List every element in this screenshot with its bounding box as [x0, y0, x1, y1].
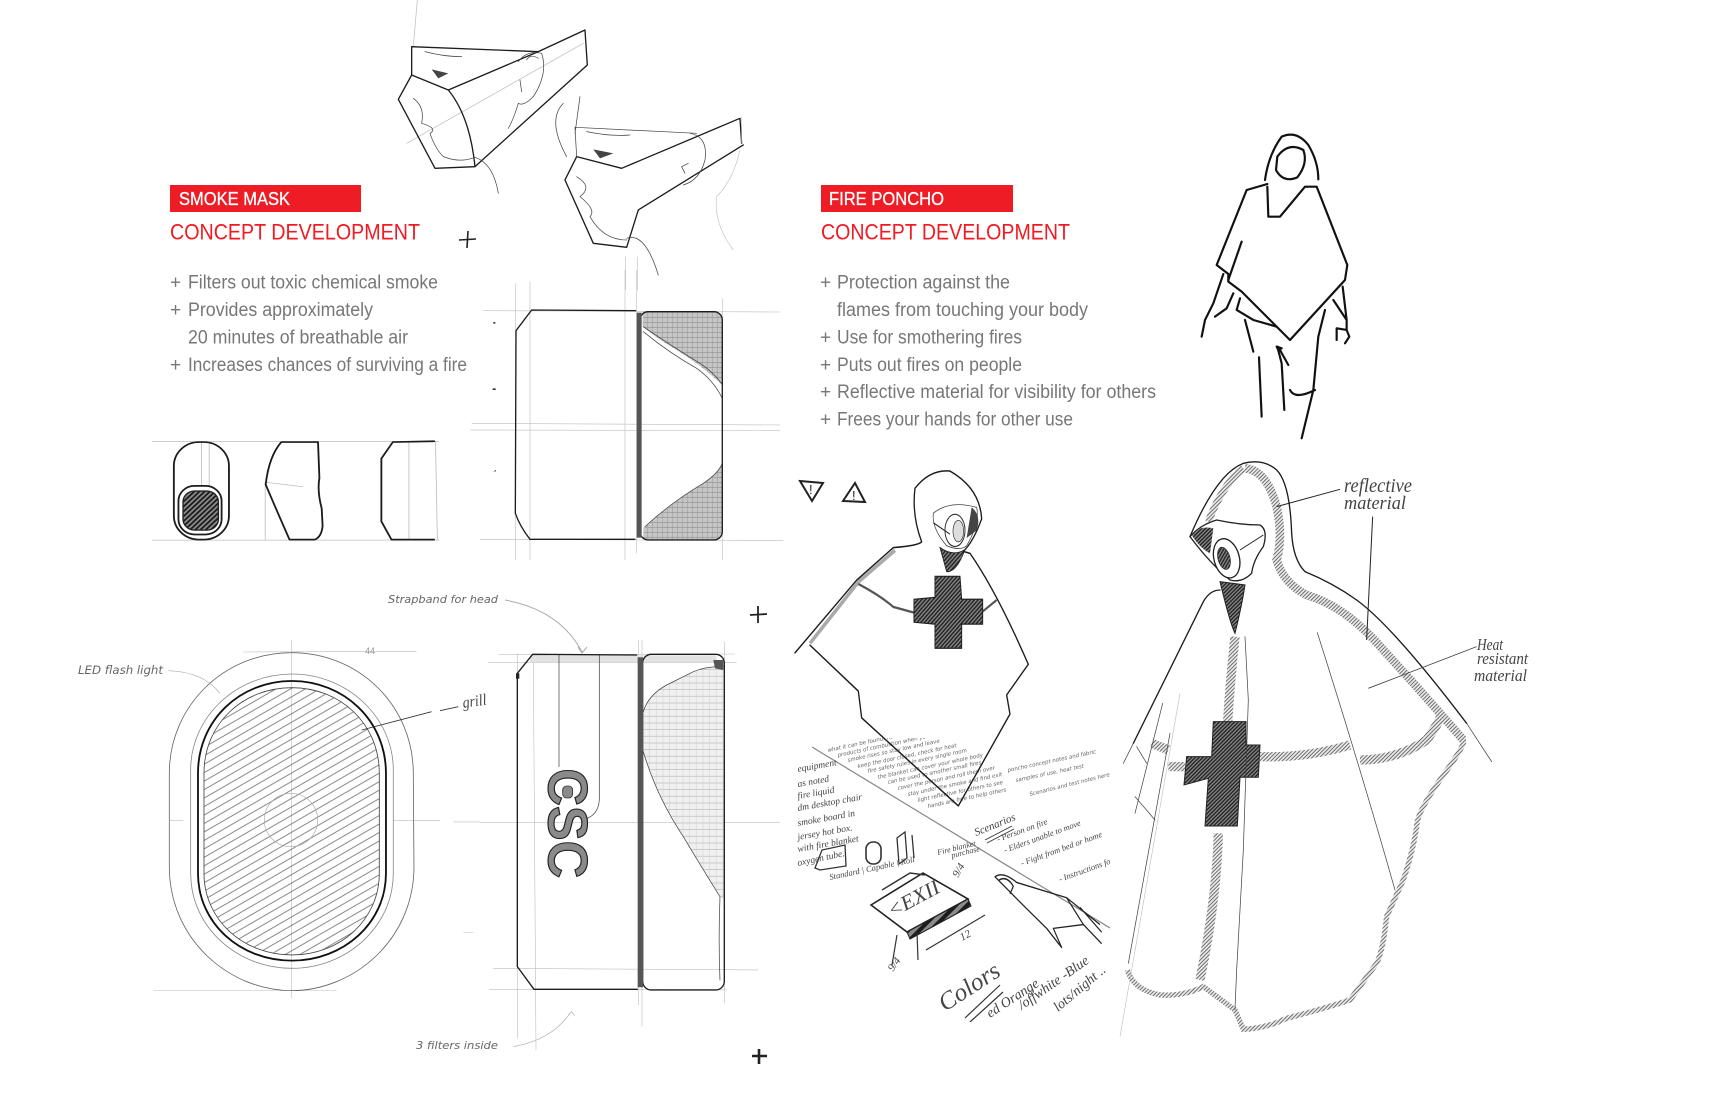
label: heat resistant material: Heat: [1476, 635, 1504, 654]
label: heat resistant material: resistant: [1477, 649, 1529, 668]
reflective band: [1245, 468, 1463, 740]
list: fire poncho features: Protection against the: [837, 272, 1010, 294]
notes: scenarios: - Fight from bed or home: [1019, 829, 1104, 868]
label: dimension: 44: [365, 646, 375, 656]
notes: exit sign packaging sketch: 9/4: [886, 955, 904, 974]
list: fire poncho features: +: [820, 355, 831, 376]
list: fire poncho features: +: [820, 410, 831, 430]
notes: left page lines: oxygen tube.: [797, 849, 846, 869]
label: 3 filters inside: 3 filters inside: [416, 1040, 498, 1052]
list: smoke mask features: [170, 272, 467, 376]
label: grill: grill: [461, 692, 488, 712]
notes: small product sketches: Fire blanket: [935, 839, 977, 857]
label: led flash light: LED flash light: [78, 663, 163, 677]
callout line: reflective: [1277, 489, 1373, 640]
notes: upper page lines: light reflective for others to see: [917, 780, 1004, 804]
icon: plus mark two: [750, 606, 767, 623]
hem band: [1127, 740, 1464, 1029]
notes: left page lines: dm desktop chair: [797, 793, 863, 814]
icon: warning triangles: [800, 481, 865, 503]
tag: smoke mask: SMOKE MASK: [179, 189, 290, 209]
sketch: strapband callout: [388, 593, 587, 653]
list: fire poncho features: +: [820, 328, 831, 348]
notes: exit sign packaging sketch: <EXII: [883, 874, 945, 922]
notes: left page lines: equipment: [797, 758, 838, 775]
notes: colors: Colors: [934, 957, 1005, 1017]
hood left band: [1208, 468, 1243, 522]
sketch: two face profiles wearing smoke mask: [398, 0, 743, 290]
heading: fire poncho concept development: CONCEPT DEVELOPMENT: [821, 220, 1070, 244]
callout line: led flash light: [168, 671, 220, 693]
face profile two: [556, 97, 743, 290]
notes: left page lines: fire liquid: [797, 785, 836, 802]
sketch: large poncho with callouts: [1120, 462, 1492, 1037]
sketch: small mask views row: [152, 441, 439, 540]
sketch: small hooded poncho figure: [795, 471, 1028, 806]
list: fire poncho features: Use for smothering fires: [837, 328, 1022, 348]
logo lettering: CSC: [536, 768, 598, 878]
notes: upper page lines: cover the person and roll them over: [897, 765, 996, 792]
notes: scenarios: [974, 815, 1110, 880]
callout line: heat resistant: [1368, 647, 1477, 688]
callout line: grill: [362, 707, 458, 730]
cross: [1184, 722, 1260, 826]
sketch: mask rear side view with logo: [480, 640, 780, 1050]
notes: upper page lines: poncho concept notes and fabric: [1006, 749, 1097, 774]
notes: small product sketches: purchase: [949, 844, 981, 860]
sketch: strapband callout: Strapband for head: [388, 593, 499, 606]
icon: warning triangles: !: [852, 488, 856, 503]
face profile one: [398, 0, 587, 193]
notes: colors: ed Orange: [984, 976, 1042, 1021]
notes: scenarios: - Elders unable to move: [1002, 818, 1082, 855]
list: smoke mask features: Increases chances of surviving a fire: [188, 355, 467, 376]
list: smoke mask features: +: [170, 355, 181, 376]
sketch: handwritten concept notes page: [795, 729, 1128, 1022]
center strip: [1200, 637, 1235, 980]
gas mask: [1190, 520, 1265, 581]
notes: upper page lines: stay under the smoke and find exit: [907, 772, 1004, 798]
notes: left page lines: jersey hot box.: [795, 823, 853, 843]
outline: [1190, 462, 1467, 723]
side view two: [381, 441, 434, 540]
tag: fire poncho: [821, 185, 1013, 212]
notes: upper page lines: Scenarios and test notes here: [1029, 772, 1111, 798]
notes: colors: [940, 958, 1106, 1022]
label: heat resistant material: material: [1474, 666, 1527, 685]
side view one: [266, 442, 323, 540]
icon: plus mark three: [752, 1049, 767, 1064]
icon: plus mark one: [459, 231, 476, 248]
list: smoke mask features: Provides approximately: [188, 300, 373, 321]
list: fire poncho features: [820, 272, 1156, 430]
list: smoke mask features: +: [170, 272, 181, 294]
label: reflective material: material: [1344, 493, 1406, 514]
notes: left page lines: with fire blanket: [797, 833, 860, 855]
list: fire poncho features: flames from touching your body: [837, 300, 1088, 321]
front view: [174, 442, 229, 540]
list: fire poncho features: +: [820, 272, 831, 294]
notes: small product sketches: [815, 832, 981, 882]
list: fire poncho features: Frees your hands for other use: [837, 410, 1073, 430]
list: fire poncho features: Reflective material for visibility for others: [837, 382, 1156, 403]
list: smoke mask features: Filters out toxic chemical smoke: [188, 272, 438, 294]
waist band: [1152, 715, 1442, 767]
notes: upper page lines: fire safety rules in every single room: [867, 748, 968, 775]
sketch: mask front view with grill: [153, 640, 480, 998]
notes: poncho on stand sketch: [995, 875, 1102, 948]
notes: upper page lines: products of combustion when you act: [836, 731, 941, 759]
list: fire poncho features: Puts out fires on people: [837, 355, 1022, 376]
notes: colors: lots/night ..: [1051, 963, 1109, 1015]
list: smoke mask features: 20 minutes of breathable air: [188, 328, 409, 348]
tag: smoke mask: [170, 185, 361, 212]
list: fire poncho features: +: [820, 382, 831, 403]
notes: scenarios: Scenarios: [973, 811, 1017, 839]
notes: upper page lines: hands are free to help others: [927, 787, 1007, 810]
label: reflective material: [1344, 475, 1412, 514]
label: reflective material: reflective: [1344, 475, 1412, 497]
notes: upper page lines: keep the door closed, check for heat: [857, 743, 958, 770]
notes: upper page lines: samples of use, heat test: [1015, 763, 1085, 784]
notes: upper page lines: smoke rises so stay low and leave: [847, 738, 941, 764]
notes: left page lines: smoke board in: [797, 809, 856, 829]
notes: exit sign packaging sketch: 12: [958, 928, 974, 944]
notes: small product sketches: Standard | Capable | Roll: [828, 854, 916, 882]
notes: exit sign packaging sketch: [871, 861, 985, 974]
notes: colors: /offwhite -Blue: [1015, 953, 1092, 1014]
notes: upper page lines: what it can be found, how to use: [827, 729, 917, 754]
notes: scenarios: - Instructions for use: [1057, 850, 1128, 884]
sketch: small walking poncho figure: [1202, 135, 1349, 438]
heading: smoke mask concept development: CONCEPT DEVELOPMENT: [170, 220, 420, 244]
notes: upper page lines: the blanket can cover your whole body: [877, 753, 984, 781]
notes: left page lines: [795, 758, 863, 869]
notes: scenarios: - Person on fire: [995, 816, 1049, 844]
icon: warning triangles: !: [809, 482, 813, 497]
notes: upper page lines: can be used to smother small fires: [887, 760, 982, 786]
notes: upper page lines: [828, 738, 1110, 808]
list: smoke mask features: +: [170, 300, 181, 321]
label: heat resistant material: [1474, 635, 1529, 685]
notes: exit sign packaging sketch: 9/4: [950, 861, 968, 880]
sketch: mask top side view: [470, 270, 783, 560]
tag: fire poncho: FIRE PONCHO: [829, 189, 944, 209]
notes: left page lines: as noted: [797, 775, 830, 790]
